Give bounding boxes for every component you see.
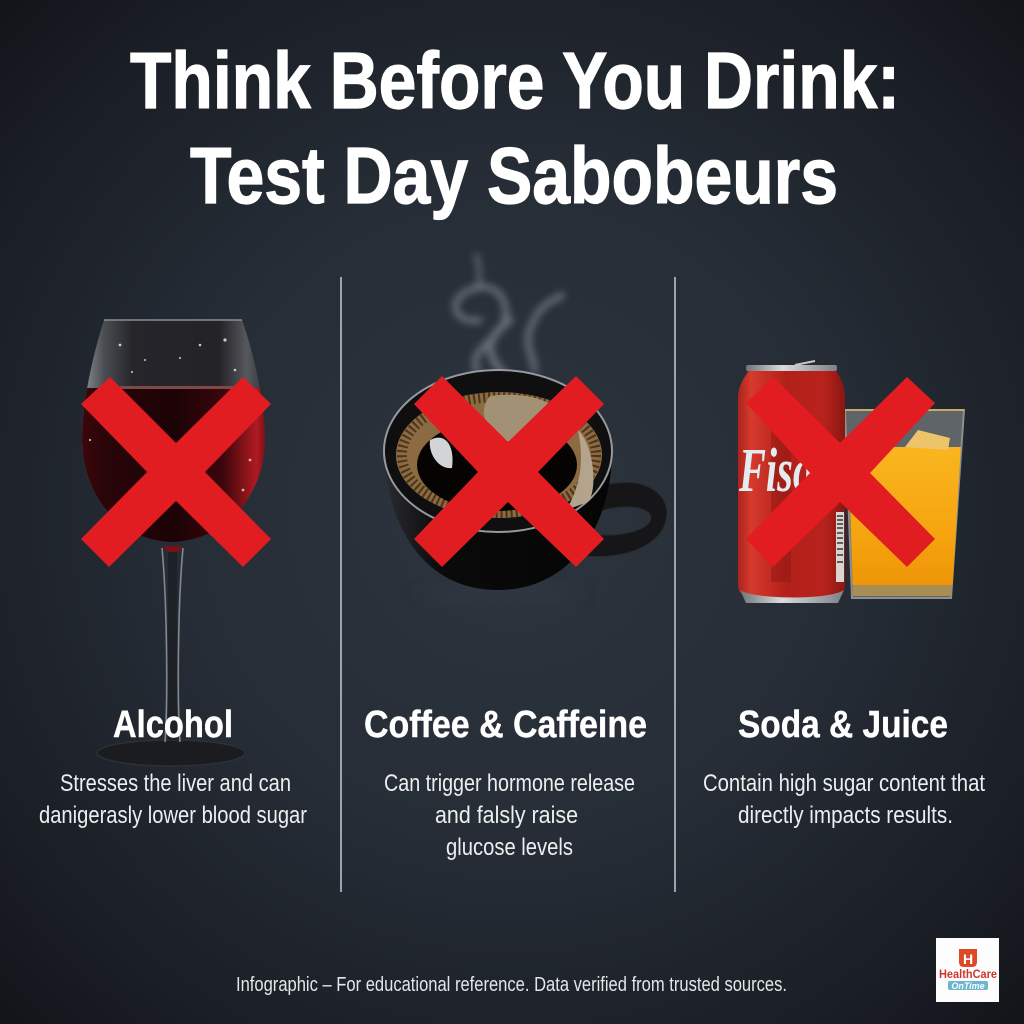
red x: soda and juice [746,377,935,567]
text: soda description: directly impacts results. [738,802,953,829]
panel: soda and juice [703,361,985,829]
red x: coffee [414,376,604,567]
footer note: Infographic – For educational reference. Data verified from trusted sources. [236,974,787,996]
icon: soda can [738,361,845,603]
title: Think Before You Drink: [130,36,900,125]
text: soda description [703,770,985,829]
heading: coffee and caffeine: Coffee & Caffeine [364,704,647,746]
text: alcohol description: Stresses the liver and can [60,770,291,797]
red x: alcohol [81,377,271,567]
panel: coffee and caffeine [364,255,667,861]
icon: wine glass [80,320,270,766]
heading: alcohol: Alcohol [113,704,233,746]
icon: soda can: Fiso [738,437,813,505]
text: coffee description: glucose levels [446,834,573,861]
badge: OnTime: OnTime [951,981,985,991]
title: Test Day Sabobeurs [190,131,838,220]
logo: HealthCare OnTime [936,938,999,1002]
text: coffee description: and falsly raise [435,802,578,829]
icon: logo badge: H [963,951,973,967]
text: alcohol description: danigerasly lower blood sugar [39,802,307,829]
icon: steam [456,255,562,375]
title [130,36,900,220]
text: coffee description: Can trigger hormone release [384,770,635,797]
text: coffee description [384,770,635,861]
text: alcohol description [39,770,307,829]
logo: HealthCare OnTime: HealthCare [939,967,997,981]
heading: soda and juice: Soda & Juice [738,704,948,746]
icon: juice glass [840,410,970,598]
panel: alcohol [39,320,307,829]
icon: coffee cup [384,370,667,602]
